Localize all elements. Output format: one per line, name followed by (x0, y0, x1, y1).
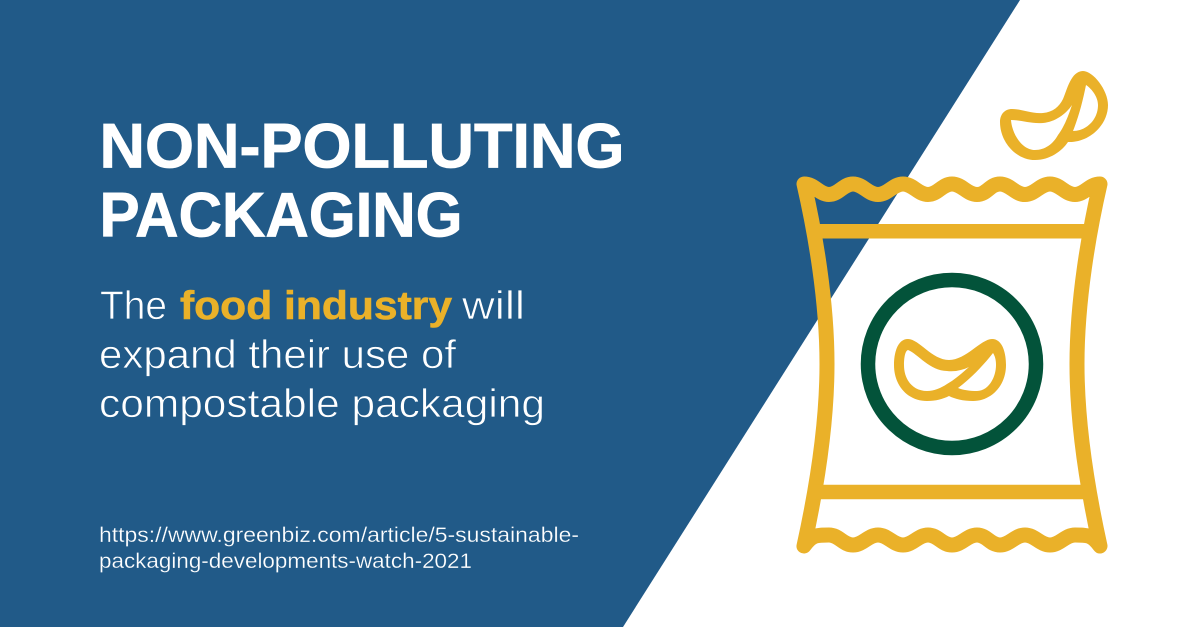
subtitle text: The (100, 284, 167, 328)
title: NON-POLLUTING (100, 112, 624, 182)
source url (99, 523, 579, 573)
bag bottom band (815, 485, 1089, 499)
subtitle text (99, 284, 545, 426)
subtitle text: expand their use of (99, 333, 457, 377)
source url: packaging-developments-watch-2021 (99, 549, 472, 573)
title (100, 112, 624, 251)
icon: green circle (868, 280, 1036, 448)
icon: chip bag (804, 184, 1100, 546)
icon: chip in circle (894, 339, 1006, 401)
source url: https://www.greenbiz.com/article/5-sustainable- (99, 523, 579, 547)
subtitle text: compostable packaging (99, 382, 545, 426)
icon: floating chip (1000, 71, 1108, 160)
title: PACKAGING (100, 181, 462, 251)
bag top band (815, 224, 1089, 239)
bag outline (804, 184, 1100, 546)
highlighted words: food industry (180, 284, 453, 328)
subtitle text: will (461, 284, 525, 328)
